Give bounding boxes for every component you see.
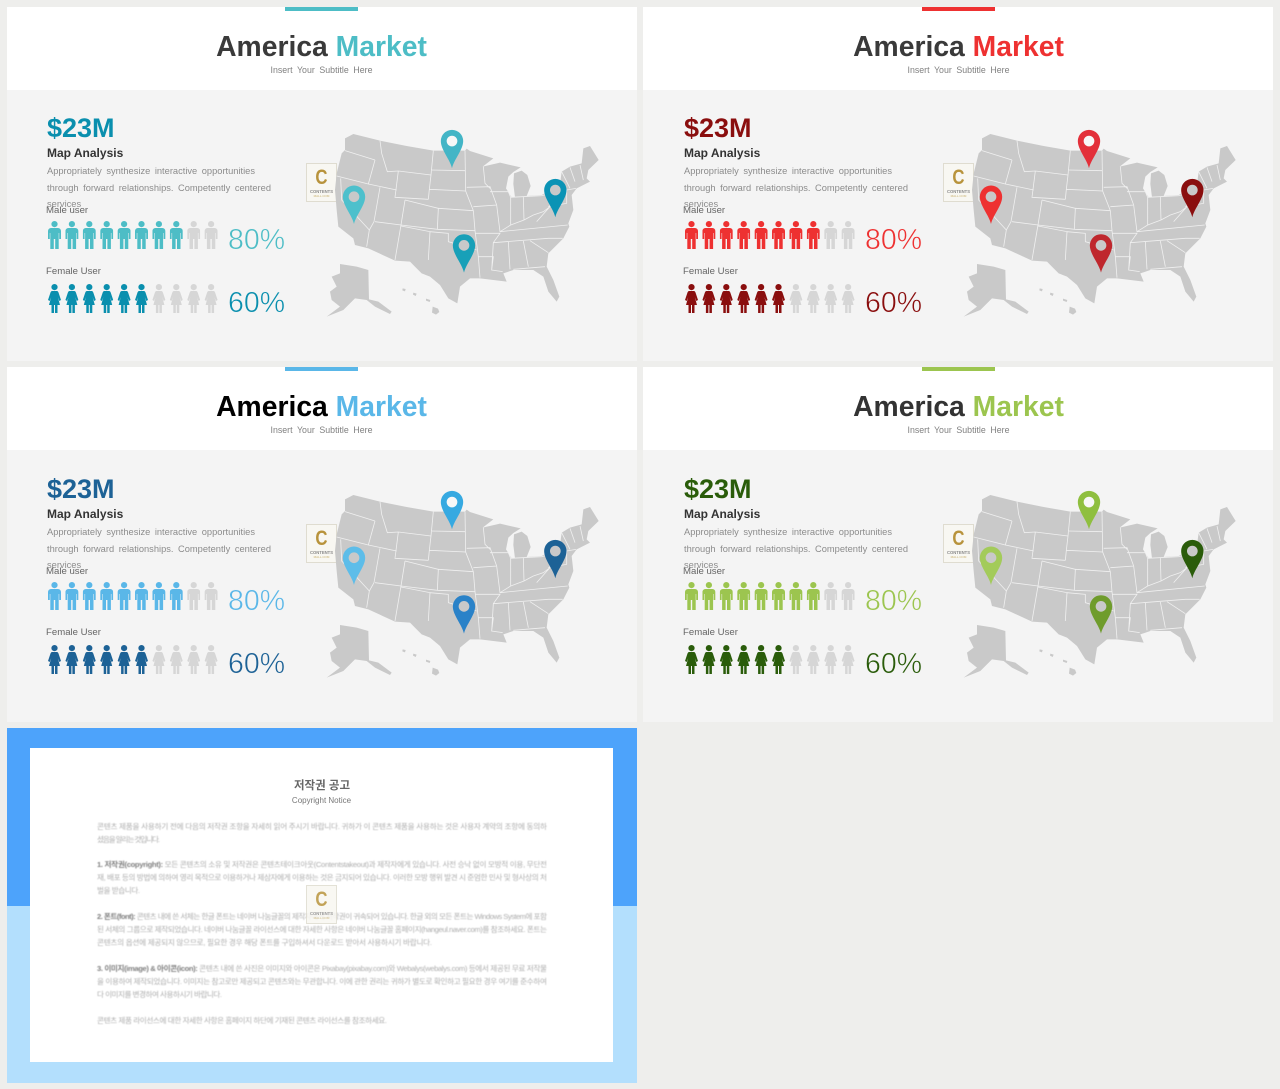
percent: female: 60% — [228, 286, 285, 318]
logo: CONTENTS — [310, 550, 333, 555]
panel: America Market blue — [7, 367, 637, 722]
paragraph: Appropriately synthesize interactive opportunities — [684, 527, 892, 537]
icon row: male 80% — [48, 221, 218, 249]
icon row: female 60% — [48, 645, 218, 674]
icon row: male 80% — [685, 221, 854, 249]
logo: CONTENTS — [310, 911, 333, 916]
title: America Market — [216, 30, 427, 62]
copyright body text: 콘텐츠 제품을 사용하기 전에 다음의 저작권 조항을 자세히 읽어 주시기 바랍니다. 귀하가 이 콘텐츠 제품을 사용하는 것은 사용자 계약의 조항에 동의하 — [97, 821, 547, 831]
paragraph: services — [684, 199, 718, 209]
logo: C — [315, 888, 328, 911]
copyright heading: 저작권 공고 — [294, 780, 350, 792]
paragraph: through forward relationships. Competently centered — [684, 182, 908, 192]
label: male: Male user — [683, 566, 725, 577]
label: female: Female User — [683, 266, 738, 277]
accent bar — [922, 367, 995, 371]
subheading: Map Analysis — [47, 507, 123, 521]
title: America Market — [853, 30, 1064, 62]
copyright body text: 콘텐츠 제품 라이선스에 대한 자세한 사항은 홈페이지 하단에 기재된 콘텐츠 라이선스를 참조하세요. — [97, 1015, 387, 1025]
paragraph — [684, 527, 908, 570]
title: America Market — [853, 390, 1064, 422]
accent bar — [285, 7, 358, 11]
paragraph: Appropriately synthesize interactive opportunities — [47, 527, 255, 537]
map with pins — [327, 490, 598, 678]
header — [7, 367, 637, 450]
paragraph: Appropriately synthesize interactive opportunities — [47, 166, 255, 176]
copyright subheading: Copyright Notice — [292, 796, 351, 805]
subheading: Map Analysis — [47, 146, 123, 160]
copyright body text: 을 이용하여 제작되었습니다. 이미지는 참고로만 제공되고 콘텐츠와는 무관합니다. 이에 관한 권리는 귀하가 별도로 확인하고 필요한 경우 여기를 준수하여 — [97, 976, 547, 986]
copyright body text: 3. 이미지(image) & 아이콘(icon): 콘텐츠 내에 쓴 사진은 이미지와 아이콘은 Pixabay(pixabay.com)와 Webalys(webalys.com) 등에서 제공된 무료 저작물 — [97, 963, 547, 973]
logo — [306, 885, 337, 924]
content — [46, 474, 598, 680]
big number: $23M — [47, 113, 115, 143]
logo: CONTENTS — [947, 189, 970, 194]
percent: male: 80% — [228, 224, 285, 256]
content — [683, 113, 1236, 318]
content — [683, 474, 1236, 680]
paragraph: through forward relationships. Competently centered — [47, 544, 271, 554]
map with pins — [964, 490, 1236, 678]
label: male: Male user — [46, 205, 88, 216]
logo: MALL.COM — [951, 194, 966, 198]
percent: male: 80% — [865, 224, 922, 256]
subtitle: Insert Your Subtitle Here — [908, 64, 1009, 74]
subtitle: Insert Your Subtitle Here — [908, 424, 1009, 434]
logo: MALL.COM — [314, 194, 329, 198]
header — [7, 7, 637, 90]
icon row: female 60% — [685, 284, 854, 313]
copyright body text: 1. 저작권(copyright): 모든 콘텐츠의 소유 및 저작권은 콘텐츠테이크아웃(Contentstakeout)과 제작자에게 있습니다. 사전 승낙 없이 모방적 이용, 무단전 — [97, 859, 547, 869]
logo: CONTENTS — [310, 189, 333, 194]
subheading: Map Analysis — [684, 507, 760, 521]
subheading: Map Analysis — [684, 146, 760, 160]
copyright body text: 벌을 받습니다. — [97, 885, 140, 895]
paragraph: services — [47, 199, 81, 209]
paragraph — [47, 166, 271, 209]
panel: copyright notice — [7, 728, 637, 1083]
logo: C — [952, 527, 965, 550]
percent: female: 60% — [865, 286, 922, 318]
logo — [306, 163, 337, 202]
label: male: Male user — [46, 566, 88, 577]
copyright body text: 2. 폰트(font): 콘텐츠 내에 쓴 서체는 한글 폰트는 네이버 나눔글꼴의 제작자에게 저작권이 귀속되어 있습니다. 한글 외의 모든 폰트는 Windows System에 포함 — [97, 911, 547, 921]
logo: C — [315, 527, 328, 550]
icon row: male 80% — [48, 582, 218, 610]
copyright body text: 셨음을 알리는 것입니다. — [97, 834, 160, 844]
percent: male: 80% — [865, 584, 922, 616]
content — [46, 113, 598, 318]
paragraph: services — [684, 560, 718, 570]
logo: CONTENTS — [947, 550, 970, 555]
logo — [943, 524, 974, 563]
icon row: female 60% — [685, 645, 854, 674]
header — [643, 367, 1273, 450]
big number: $23M — [684, 474, 752, 504]
percent: female: 60% — [228, 648, 285, 680]
paragraph — [47, 527, 271, 570]
label: female: Female User — [683, 627, 738, 638]
map with pins — [327, 130, 598, 316]
copyright body text: 다 이미지를 변경하여 사용하시기 바랍니다. — [97, 989, 222, 999]
subtitle: Insert Your Subtitle Here — [271, 424, 372, 434]
panel: America Market red — [643, 7, 1273, 361]
logo — [943, 163, 974, 202]
icon row: female 60% — [48, 284, 218, 313]
header — [643, 7, 1273, 90]
percent: male: 80% — [228, 584, 285, 616]
paragraph: services — [47, 560, 81, 570]
logo: C — [315, 166, 328, 189]
subtitle: Insert Your Subtitle Here — [271, 64, 372, 74]
logo — [306, 524, 337, 563]
paragraph: through forward relationships. Competently centered — [684, 544, 908, 554]
icon row: male 80% — [685, 582, 854, 610]
label: male: Male user — [683, 205, 725, 216]
paragraph — [684, 166, 908, 209]
accent bar — [285, 367, 358, 371]
label: female: Female User — [46, 266, 101, 277]
big number: $23M — [684, 113, 752, 143]
copyright body text: 재, 배포 등의 방법에 의하여 영리 목적으로 이용하거나 제삼자에게 이용하는 것은 금지되어 있습니다. 이러한 모방 행위 발견 시 준엄한 민사 및 형사상의 처 — [97, 872, 547, 882]
panel: America Market teal — [7, 7, 637, 361]
paragraph: through forward relationships. Competently centered — [47, 182, 271, 192]
big number: $23M — [47, 474, 115, 504]
copyright body text — [96, 821, 547, 1025]
logo: C — [952, 166, 965, 189]
logo: MALL.COM — [314, 916, 329, 920]
paragraph: Appropriately synthesize interactive opportunities — [684, 166, 892, 176]
percent: female: 60% — [865, 648, 922, 680]
label: female: Female User — [46, 627, 101, 638]
logo: MALL.COM — [314, 555, 329, 559]
title: America Market — [216, 390, 427, 422]
logo: MALL.COM — [951, 555, 966, 559]
panel: America Market green — [643, 367, 1273, 722]
copyright body text: 콘텐츠의 옵션에 제공되지 않으므로, 필요한 경우 해당 폰트를 구입하셔서 다운로드 받아서 사용하시기 바랍니다. — [97, 937, 432, 947]
accent bar — [922, 7, 995, 11]
copyright body text: 된 서체의 그룹으로 제작되었습니다. 네이버 나눔글꼴 라이선스에 대한 자세한 사항은 네이버 나눔글꼴 홈페이지(hangeul.naver.com)를 참조하세요. 폰트는 — [97, 924, 547, 934]
map with pins — [964, 130, 1236, 316]
